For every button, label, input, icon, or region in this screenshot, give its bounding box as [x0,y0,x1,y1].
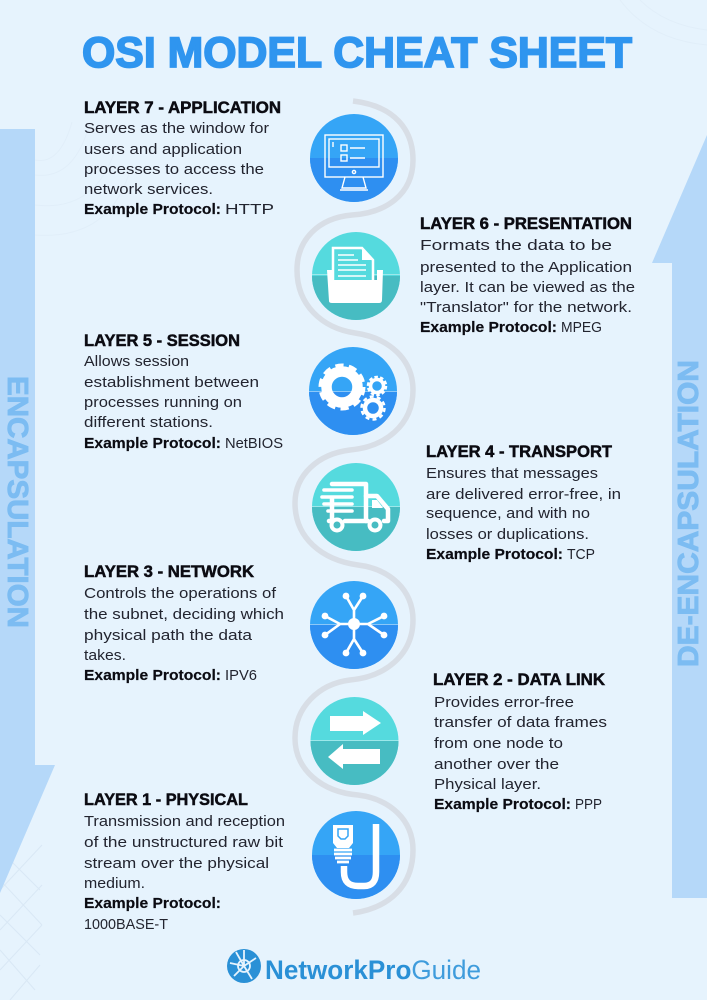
text block: layer 3: LAYER 3 - NETWORK [84,563,254,581]
text block: layer 4 [426,443,621,563]
text block: layer 2: from one node to [434,735,563,752]
text block: layer 2: Physical layer. [434,776,541,793]
text block: layer 5: different stations. [84,414,213,431]
text block: layer 7: Example Protocol: [84,201,221,218]
text block: layer 5: NetBIOS [225,435,283,452]
text block: layer 1: Example Protocol: [84,895,221,912]
text block: layer 5: Allows session [84,353,189,370]
text block: layer 5 [84,332,283,452]
text block: layer 5: LAYER 5 - SESSION [84,332,240,350]
text block: layer 4: Example Protocol: [426,546,563,563]
title: OSI MODEL CHEAT SHEET [82,29,632,77]
text block: layer 6: layer. It can be viewed as the [420,279,635,296]
text block: layer 7 [84,99,281,218]
text block: layer 1: of the unstructured raw bit [84,834,284,851]
text block: layer 5: Example Protocol: [84,435,221,452]
icon: layer 5 gears [309,347,397,435]
text block: layer 7: processes to access the [84,161,264,178]
text block: layer 7: HTTP [225,201,274,218]
text block: layer 7: Serves as the window for [84,120,269,137]
text block: layer 6: MPEG [561,319,602,336]
arrow: de-encapsulation [652,135,707,898]
icon: layer 7 monitor [310,114,398,202]
text block: layer 1 [84,791,285,933]
text block: layer 4: TCP [567,546,595,563]
text block: layer 3: takes. [84,647,126,664]
text block: layer 6 [420,215,635,336]
text block: layer 4: sequence, and with no [426,505,590,522]
text block: layer 1: stream over the physical [84,855,269,872]
text block: layer 1: LAYER 1 - PHYSICAL [84,791,248,809]
text block: layer 6: "Translator" for the network. [420,299,632,316]
text block: layer 3: IPV6 [225,667,257,684]
logo [227,949,481,985]
text block: layer 6: presented to the Application [420,259,632,276]
icon: layer 1 cable [312,811,400,899]
icon: logo globe [227,949,261,983]
text block: layer 4: LAYER 4 - TRANSPORT [426,443,612,461]
text block: layer 2: Example Protocol: [434,796,571,813]
text block: layer 5: establishment between [84,374,259,391]
text block: layer 4: are delivered error-free, in [426,486,621,503]
icon: layer 2 arrows [310,697,398,785]
text block: layer 3: Example Protocol: [84,667,221,684]
text block: layer 6: Example Protocol: [420,319,557,336]
logo wordmark: NetworkProGuide [265,955,481,985]
text block: layer 2 [433,671,607,813]
text block: layer 2: transfer of data frames [434,714,607,731]
arrow: encapsulation [0,129,55,893]
text block: layer 3: physical path the data [84,627,253,644]
text block: layer 1: 1000BASE-T [84,916,168,933]
text block: layer 2: another over the [434,756,559,773]
text block: layer 3: Controls the operations of [84,585,277,602]
icon: layer 4 truck [312,463,400,551]
text block: layer 3 [84,563,284,684]
text block: layer 2: PPP [575,796,602,813]
text block: layer 1: Transmission and reception [84,813,285,830]
label: de-encapsulation: DE-ENCAPSULATION [673,360,705,667]
text block: layer 7: LAYER 7 - APPLICATION [84,99,281,117]
icon: layer 3 network [310,581,398,669]
text block: layer 4: Ensures that messages [426,465,598,482]
text block: layer 7: network services. [84,181,213,198]
text block: layer 7: users and application [84,141,242,158]
text block: layer 6: Formats the data to be [420,237,612,254]
text block: layer 4: losses or duplications. [426,526,589,543]
text block: layer 2: Provides error-free [434,694,574,711]
text block: layer 1: medium. [84,875,145,892]
text block: layer 5: processes running on [84,394,242,411]
winding connector line [295,101,413,913]
label: encapsulation: ENCAPSULATION [1,376,33,628]
text block: layer 6: LAYER 6 - PRESENTATION [420,215,632,233]
text block: layer 3: the subnet, deciding which [84,606,284,623]
text block: layer 2: LAYER 2 - DATA LINK [433,671,605,689]
icon: layer 6 folder [312,232,400,320]
